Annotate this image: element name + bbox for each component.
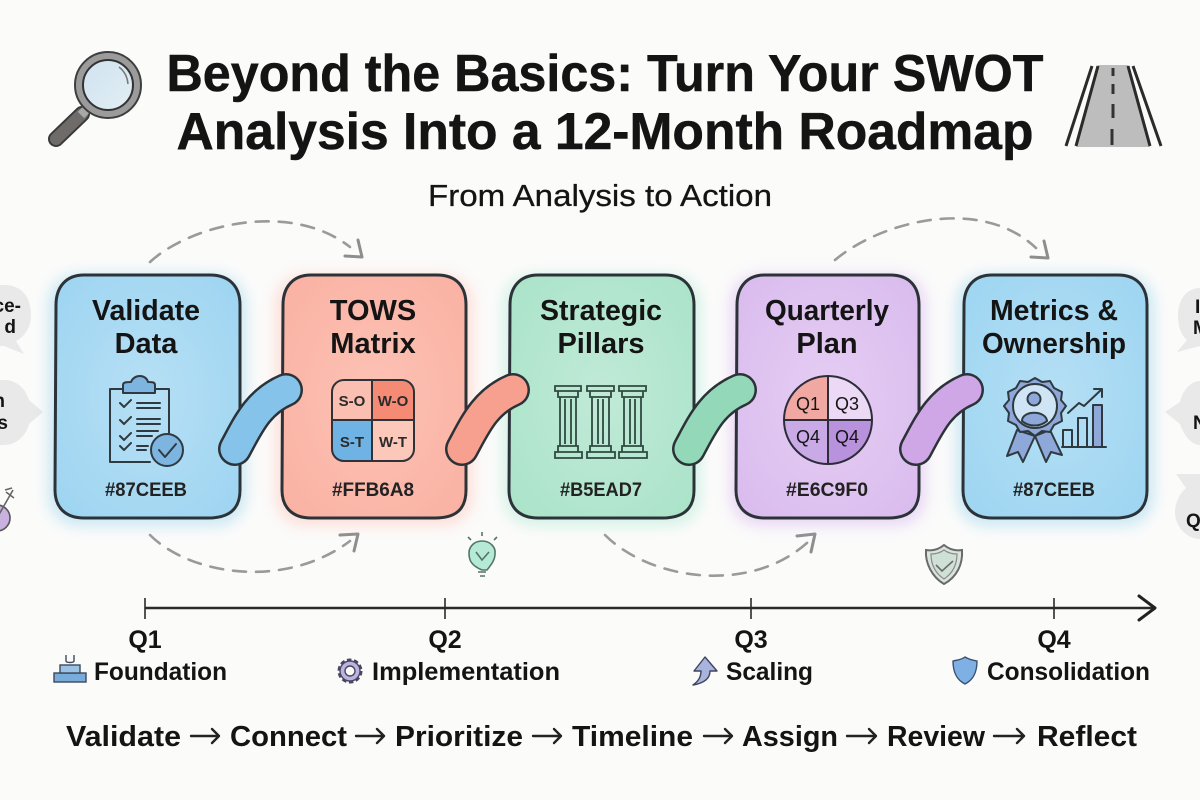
callout: left bubble 1: d <box>4 317 16 338</box>
panel: validate data <box>48 274 246 526</box>
hex label: #87CEEB <box>1013 480 1095 501</box>
icon: target <box>0 488 14 531</box>
callout: right bubble 2 <box>1165 381 1200 445</box>
quarter: Q4 consolidation <box>953 626 1150 686</box>
connector: purple <box>916 390 967 449</box>
heading: metrics and ownership: Ownership <box>982 328 1126 360</box>
connector: blue <box>235 390 286 449</box>
panel: strategic pillars <box>503 274 701 526</box>
process flow <box>66 721 1137 753</box>
process flow: Prioritize <box>395 721 523 753</box>
quarter: Q1 foundation: Foundation <box>94 658 227 686</box>
panel: tows matrix <box>275 274 473 526</box>
process flow: Reflect <box>1037 721 1137 753</box>
connector: green <box>689 390 740 449</box>
icon: blue shield <box>953 657 977 684</box>
quarter: Q1 foundation: Q1 <box>128 626 162 654</box>
process flow: Validate <box>66 721 181 753</box>
hex label: #E6C9F0 <box>786 480 868 501</box>
quarter: Q2 implementation: Q2 <box>428 626 462 654</box>
heading: quarterly plan: Plan <box>796 328 858 360</box>
heading: metrics and ownership <box>982 295 1126 360</box>
icon: quarter pie: Q1 <box>796 394 820 414</box>
heading: quarterly plan <box>765 295 889 360</box>
heading: validate data <box>92 295 200 360</box>
hex label: #B5EAD7 <box>560 480 642 501</box>
icon: three pillars <box>555 386 647 458</box>
icon: light bulb <box>468 532 497 576</box>
dashed arrow: bottom left <box>150 534 358 572</box>
icon: quarter pie: Q4 <box>835 427 859 447</box>
heading: strategic pillars: Pillars <box>557 328 645 360</box>
heading: strategic pillars <box>540 295 662 360</box>
icon: gear <box>340 661 360 681</box>
title <box>166 45 1044 161</box>
panel: metrics and ownership <box>956 274 1154 526</box>
callout: left bubble 2 <box>0 380 43 445</box>
subtitle: From Analysis to Action <box>428 178 772 213</box>
quarter: Q2 implementation: Implementation <box>372 658 560 686</box>
title: Beyond the Basics: Turn Your SWOT <box>166 45 1044 103</box>
icon: tows grid: S-T <box>340 434 364 451</box>
heading: strategic pillars: Strategic <box>540 295 662 327</box>
process flow: Timeline <box>572 721 693 753</box>
dashed arrow: top left <box>150 221 362 262</box>
heading: tows matrix <box>330 295 416 360</box>
icon: quarter pie: Q3 <box>835 394 859 414</box>
heading: metrics and ownership: Metrics & <box>990 295 1118 327</box>
icon: tows grid: W-O <box>378 393 409 410</box>
icon: shield with check <box>926 545 962 584</box>
icon: tows grid: W-T <box>379 434 407 451</box>
icon: up arrow <box>693 657 717 685</box>
heading: tows matrix: Matrix <box>330 328 416 360</box>
quarter: Q4 consolidation: Q4 <box>1037 626 1071 654</box>
timeline <box>145 596 1155 620</box>
quarter: Q4 consolidation: Consolidation <box>987 658 1150 686</box>
dashed arrow: bottom middle <box>605 534 815 576</box>
icon: magnifying glass <box>56 52 141 139</box>
hex label: #FFB6A8 <box>332 480 414 501</box>
connector: red <box>462 390 513 449</box>
quarter: Q3 scaling: Scaling <box>726 658 813 686</box>
heading: quarterly plan: Quarterly <box>765 295 889 327</box>
callout: right bubble 1 <box>1177 288 1200 352</box>
title: Analysis Into a 12-Month Roadmap <box>176 103 1034 161</box>
heading: validate data: Validate <box>92 295 200 327</box>
panel: quarterly plan <box>730 274 926 526</box>
callout: right bubble 3 <box>1175 474 1200 539</box>
icon: quarter pie: Q4 <box>796 427 820 447</box>
process flow: Review <box>887 721 985 753</box>
dashed arrow: top right <box>835 218 1048 260</box>
quarter: Q2 implementation <box>340 626 560 686</box>
quarter: Q3 scaling: Q3 <box>734 626 768 654</box>
icon: clipboard checklist <box>110 376 183 466</box>
heading: validate data: Data <box>115 328 178 360</box>
process flow: Connect <box>230 721 347 753</box>
icon: road <box>1066 65 1161 147</box>
icon: tows grid <box>332 380 414 461</box>
quarter: Q3 scaling <box>693 626 813 686</box>
icon: award badge with chart <box>1004 378 1106 462</box>
heading: tows matrix: TOWS <box>330 295 416 327</box>
quarter: Q1 foundation <box>54 626 227 686</box>
icon: foundation steps <box>54 655 86 682</box>
callout: left bubble 1 <box>0 285 31 354</box>
icon: tows grid: S-O <box>339 393 366 410</box>
hex label: #87CEEB <box>105 480 187 501</box>
process flow: Assign <box>742 721 838 753</box>
icon: quarter pie <box>784 376 872 464</box>
